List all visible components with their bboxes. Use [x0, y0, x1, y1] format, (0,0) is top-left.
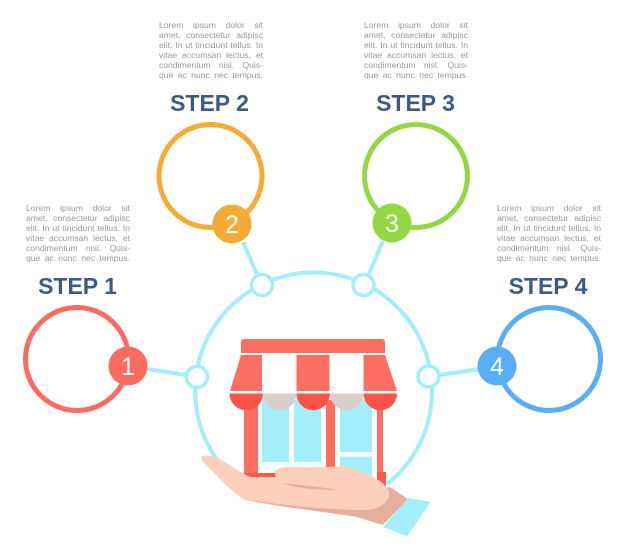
text block: step 4: amet, consectetur adipisc: [497, 213, 601, 223]
text block: step 2: vitae accumsan lectus, et: [159, 50, 263, 60]
text block: step 1: condimentum nisl. Quis-: [26, 243, 130, 253]
step 4 ring and badge: [478, 308, 600, 410]
central ring with connectors: [147, 241, 480, 484]
step 2 ring and badge: [159, 124, 262, 244]
step headings: STEP 4: [509, 273, 588, 299]
connector nodes: [186, 274, 439, 388]
text block: step 1: amet, consectetur adipisc: [26, 213, 130, 223]
text block: step 2: condimentum nisl. Quis-: [159, 60, 263, 70]
text block: step 4: vitae accumsan lectus, et: [497, 233, 601, 243]
text block: step 4: [497, 203, 601, 263]
text block: step 4: que ac nunc nec tempus.: [497, 253, 601, 263]
text block: step 2: que ac nunc nec tempus.: [159, 70, 263, 80]
text block: step 3: condimentum nisl. Quis-: [364, 60, 468, 70]
text block: step 2: Lorem ipsum dolor sit: [159, 20, 263, 30]
step 3 ring and badge: 3: [385, 210, 399, 238]
text block: step 2: [159, 20, 263, 80]
step 1 ring and badge: 1: [121, 353, 135, 381]
text block: step 1: vitae accumsan lectus, et: [26, 233, 130, 243]
text block: step 2: amet, consectetur adipisc: [159, 30, 263, 40]
text block: step 1: Lorem ipsum dolor sit: [26, 203, 130, 213]
text block: step 3: que ac nunc nec tempus.: [364, 70, 468, 80]
step headings: STEP 2: [170, 90, 249, 116]
icon: hand holding shop: [201, 455, 408, 525]
text block: step 4: elit. In ut tincidunt tellus. In: [497, 223, 601, 233]
step 3 ring and badge: [364, 124, 468, 242]
text block: step 3: [364, 20, 468, 80]
text block: step 4: Lorem ipsum dolor sit: [497, 203, 601, 213]
icon: sleeve cuff: [383, 498, 431, 536]
step headings: [38, 90, 588, 299]
text block: step 3: vitae accumsan lectus, et: [364, 50, 468, 60]
text block: step 1: elit. In ut tincidunt tellus. In: [26, 223, 130, 233]
text block: step 1: que ac nunc nec tempus.: [26, 253, 130, 263]
text block: step 3: amet, consectetur adipisc: [364, 30, 468, 40]
step 4 ring and badge: 4: [490, 353, 504, 381]
text block: step 2: elit. In ut tincidunt tellus. In: [159, 40, 263, 50]
text block: step 3: elit. In ut tincidunt tellus. In: [364, 40, 468, 50]
text block: step 1: [26, 203, 130, 263]
step headings: STEP 1: [38, 273, 117, 299]
text block: step 4: condimentum nisl. Quis-: [497, 243, 601, 253]
step 1 ring and badge: [26, 308, 148, 410]
icon: shop: [230, 339, 397, 486]
step 2 ring and badge: 2: [225, 211, 239, 239]
text block: step 3: Lorem ipsum dolor sit: [364, 20, 468, 30]
step headings: STEP 3: [376, 90, 455, 116]
